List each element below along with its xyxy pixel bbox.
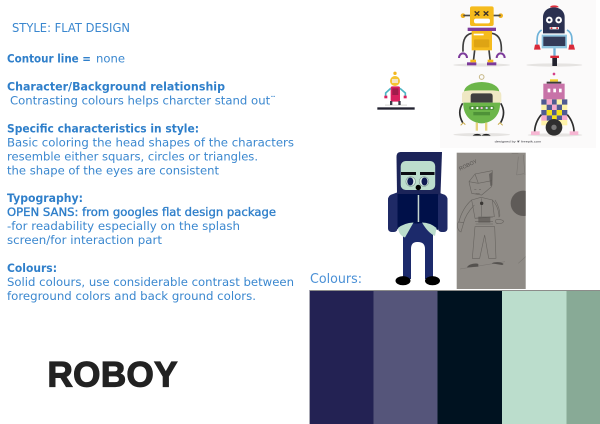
pockets bbox=[398, 222, 436, 238]
illustration: Roboy character bbox=[388, 152, 448, 285]
arms bbox=[388, 191, 448, 232]
text block: character background relationship: Contrasting colours helps charcter stand out¨ bbox=[10, 94, 276, 108]
legs bbox=[403, 222, 433, 279]
text block: typography: screen/for interaction part bbox=[7, 233, 162, 247]
icon: green robot bbox=[453, 75, 510, 136]
sketch label: ROBOY bbox=[458, 159, 479, 172]
eyes bbox=[406, 177, 429, 186]
swatch: slate purple bbox=[374, 291, 438, 424]
icon: yellow robot bbox=[453, 6, 510, 67]
image: pencil sketch of robot bbox=[456, 152, 526, 289]
image: four flat robots bbox=[440, 0, 600, 148]
hoodie zip bbox=[418, 195, 419, 222]
caption: freepik credit: designed by ❦ freepik.com bbox=[495, 140, 542, 144]
brows bbox=[401, 172, 434, 175]
swatch: near black bbox=[438, 291, 502, 424]
text block: typography: Typography: bbox=[7, 191, 83, 205]
hood bbox=[396, 152, 442, 198]
text block: colours: foreground colors and back ground colors. bbox=[7, 289, 256, 303]
shoes bbox=[396, 276, 440, 285]
text block: character background relationship: Character/Background relationship bbox=[7, 80, 225, 94]
text block: specific characteristics: Basic coloring the head shapes of the characters bbox=[7, 136, 294, 150]
heading: colours: Colours: bbox=[310, 271, 362, 287]
text block: colours: Solid colours, use considerable contrast between bbox=[7, 275, 294, 289]
text block: contour line: none bbox=[96, 52, 125, 66]
title: ROBOY: ROBOY bbox=[48, 356, 178, 394]
icon: navy robot bbox=[526, 5, 582, 67]
palette swatches bbox=[309, 290, 600, 424]
nose bbox=[416, 185, 421, 190]
text block: specific characteristics: resemble either squars, circles or triangles. bbox=[7, 150, 258, 164]
text block: contour line: Contour line = bbox=[7, 52, 91, 66]
icon: pink pixel robot bbox=[528, 73, 582, 137]
icon: small robot bbox=[377, 72, 415, 110]
swatch: mint bbox=[502, 291, 566, 424]
face bbox=[401, 161, 435, 190]
text block: typography bbox=[7, 191, 276, 247]
text block: colours bbox=[7, 261, 294, 303]
panel: style notes bbox=[7, 21, 294, 303]
text block: specific characteristics bbox=[7, 122, 294, 178]
text block: colours: Colours: bbox=[7, 261, 57, 275]
swatch: sage bbox=[566, 291, 600, 424]
swatch: navy bbox=[310, 291, 374, 424]
torso hoodie bbox=[398, 194, 438, 230]
text block: typography: -for readability especially on the splash bbox=[7, 219, 240, 233]
text block: specific characteristics: the shape of the eyes are consistent bbox=[7, 164, 219, 178]
text block: character background relationship bbox=[7, 80, 276, 108]
text block: typography: OPEN SANS: from googles flat design package bbox=[7, 205, 276, 219]
heading: style: STYLE: FLAT DESIGN bbox=[12, 21, 130, 35]
text block: specific characteristics: Specific characteristics in style: bbox=[7, 122, 199, 136]
